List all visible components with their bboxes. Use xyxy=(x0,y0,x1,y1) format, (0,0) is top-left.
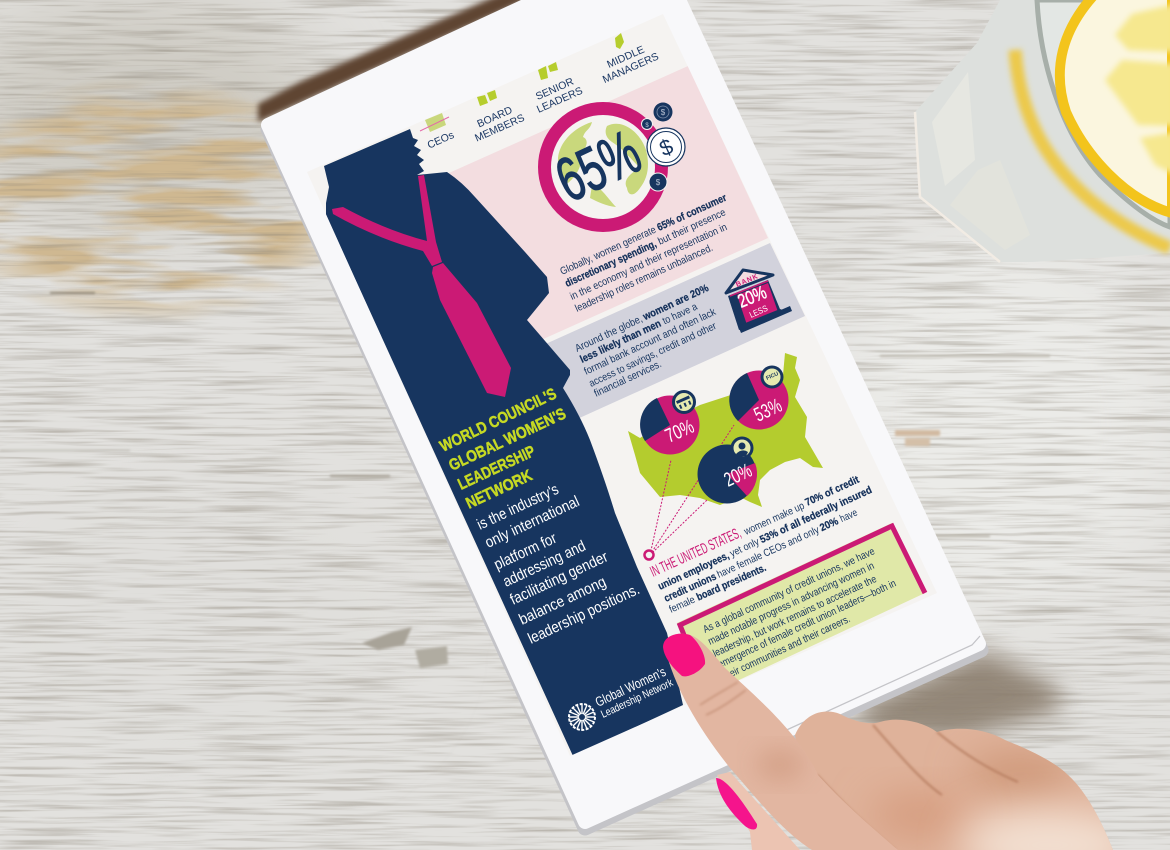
pie chart: 53% female CEOs xyxy=(729,367,788,430)
text block: banking access: to have a xyxy=(661,301,699,327)
glass with lemon slice xyxy=(915,0,1170,262)
text block: consumer spending: discretionary spending, xyxy=(563,238,658,290)
icon: lemon slice xyxy=(1060,0,1170,213)
logo: network wheel and name: Leadership Network xyxy=(599,677,675,721)
silhouette: navy suit figure xyxy=(324,129,683,756)
text block: United States statistics: 20% xyxy=(818,515,841,534)
labels: leadership roles: MIDDLE xyxy=(605,44,646,71)
screen: infographic page xyxy=(307,14,937,756)
text block: United States statistics: female xyxy=(667,594,697,616)
text block: network description: facilitating gender xyxy=(508,548,611,609)
labels: leadership roles: MEMBERS xyxy=(473,112,526,145)
text block: banking access: formal bank account and often lack xyxy=(582,306,718,378)
text block: United States statistics: women make up xyxy=(742,500,807,538)
text block: United States statistics: yet only xyxy=(728,536,762,560)
heading: network name: LEADERSHIP xyxy=(456,443,538,494)
text block: United States statistics: have xyxy=(838,507,860,525)
text block: consumer spending: Globally, women generate xyxy=(558,224,658,278)
text block: banking access: less likely than men xyxy=(578,318,663,366)
text block: United States statistics: credit unions xyxy=(662,571,718,605)
text block: banking access: access to savings, credit and other xyxy=(587,320,719,390)
icon: bank 20% less xyxy=(726,270,792,333)
logo: network wheel and name: Global Women's xyxy=(593,664,668,710)
text block: network description: balance among xyxy=(517,573,609,629)
text block: consumer spending: but their presence xyxy=(656,206,728,248)
pie chart: 70% credit union employees: 70% xyxy=(662,416,698,448)
icon: bank 20% less: 20% xyxy=(735,282,770,313)
text block: United States statistics: union employees, xyxy=(656,550,731,593)
text block: network description: platform for xyxy=(492,530,559,574)
glass body xyxy=(915,0,1170,262)
panel: gray banking band xyxy=(530,243,805,420)
callout: green commitment box: made notable progress in advancing women in xyxy=(706,560,876,648)
icon: bank 20% less: BANK xyxy=(735,273,759,289)
heading: network name xyxy=(437,385,569,513)
labels: leadership roles: CEOs xyxy=(426,129,456,151)
text block: United States statistics xyxy=(648,474,874,616)
text block: network description: only international xyxy=(483,493,582,552)
labels: leadership roles: SENIOR xyxy=(534,75,576,103)
chart: 65% globe ring: 65% xyxy=(546,118,651,216)
dotted leader lines xyxy=(650,425,734,555)
text block: consumer spending: leadership roles remains unbalanced. xyxy=(573,242,715,315)
pie chart: 70% credit union employees xyxy=(640,392,700,454)
text block: United States statistics: 53% of all federally insured xyxy=(758,484,874,546)
yellow reflection xyxy=(1015,50,1170,248)
hand with pink nails xyxy=(663,634,1140,850)
text block: United States statistics: 70% of credit xyxy=(803,474,861,509)
text block: network description xyxy=(475,481,642,648)
text block: United States statistics: board presidents. xyxy=(695,562,768,603)
text block: network description: is the industry's xyxy=(475,481,562,534)
pie chart: 53% female CEOs: FICU xyxy=(765,371,780,382)
labels: leadership roles: LEADERS xyxy=(535,85,585,116)
callout: green commitment box: their communities and their careers. xyxy=(721,613,852,683)
icons: dollar coins: $ xyxy=(656,178,661,187)
text block: banking access xyxy=(573,282,719,400)
shadow: tablet on table xyxy=(258,0,1060,740)
hand: lower small finger xyxy=(716,772,800,850)
labels: leadership roles: BOARD xyxy=(475,104,515,130)
labels: leadership roles: MANAGERS xyxy=(601,51,661,86)
callout: green commitment box: emergence of female credit union leaders—both in xyxy=(716,577,898,671)
pie chart: 20% board presidents xyxy=(698,438,757,504)
text block: consumer spending: in the economy and their representation in xyxy=(568,221,729,303)
heading: network name: GLOBAL WOMEN'S xyxy=(447,405,569,475)
icon: lower nail xyxy=(716,778,757,830)
icons: clipped leadership figures xyxy=(420,33,624,132)
heading: network name: NETWORK xyxy=(464,467,535,513)
glass rim xyxy=(1037,0,1170,227)
pie chart: 53% female CEOs: 53% xyxy=(751,395,786,427)
globe continents xyxy=(558,122,648,207)
tie xyxy=(332,175,511,397)
tablet body xyxy=(268,0,981,828)
hand: index finger xyxy=(663,634,898,850)
icons: dollar coins: $ xyxy=(661,108,666,117)
icons: dollar coins: $ xyxy=(656,134,677,161)
icons: dollar coins: $ xyxy=(645,123,649,129)
heading: network name: WORLD COUNCIL'S xyxy=(437,385,560,456)
text block: network description: addressing and xyxy=(501,538,588,591)
text block: consumer spending xyxy=(558,192,729,315)
callout: green commitment box: As a global community of credit unions, we have xyxy=(701,545,877,636)
table knots xyxy=(362,627,448,668)
callout: green commitment box: leadership, but work remains to accelerate the xyxy=(711,573,879,660)
text block: network description: leadership positions. xyxy=(526,581,642,648)
text block: banking access: women are 20% xyxy=(640,282,711,323)
icon: index nail xyxy=(663,634,705,676)
text block: United States statistics: IN THE UNITED STATES, xyxy=(648,525,744,581)
hand: back fingers xyxy=(795,712,1140,850)
icons: dollar coins xyxy=(642,102,685,191)
panel: pink spending band xyxy=(440,66,768,345)
icon: bank 20% less: LESS xyxy=(748,303,769,320)
callout: green commitment box xyxy=(677,523,925,695)
marker: leader origin xyxy=(644,550,654,560)
text block: United States statistics: have female CEOs and only xyxy=(715,524,822,581)
text block: banking access: financial services. xyxy=(592,358,663,400)
logo: network wheel and name xyxy=(569,664,675,730)
map: United States xyxy=(628,353,823,507)
text block: banking access: Around the globe, xyxy=(573,313,644,355)
pie chart: 20% board presidents: 20% xyxy=(721,460,756,492)
labels: leadership roles xyxy=(426,44,661,151)
text block: consumer spending: 65% of consumer xyxy=(655,192,729,234)
